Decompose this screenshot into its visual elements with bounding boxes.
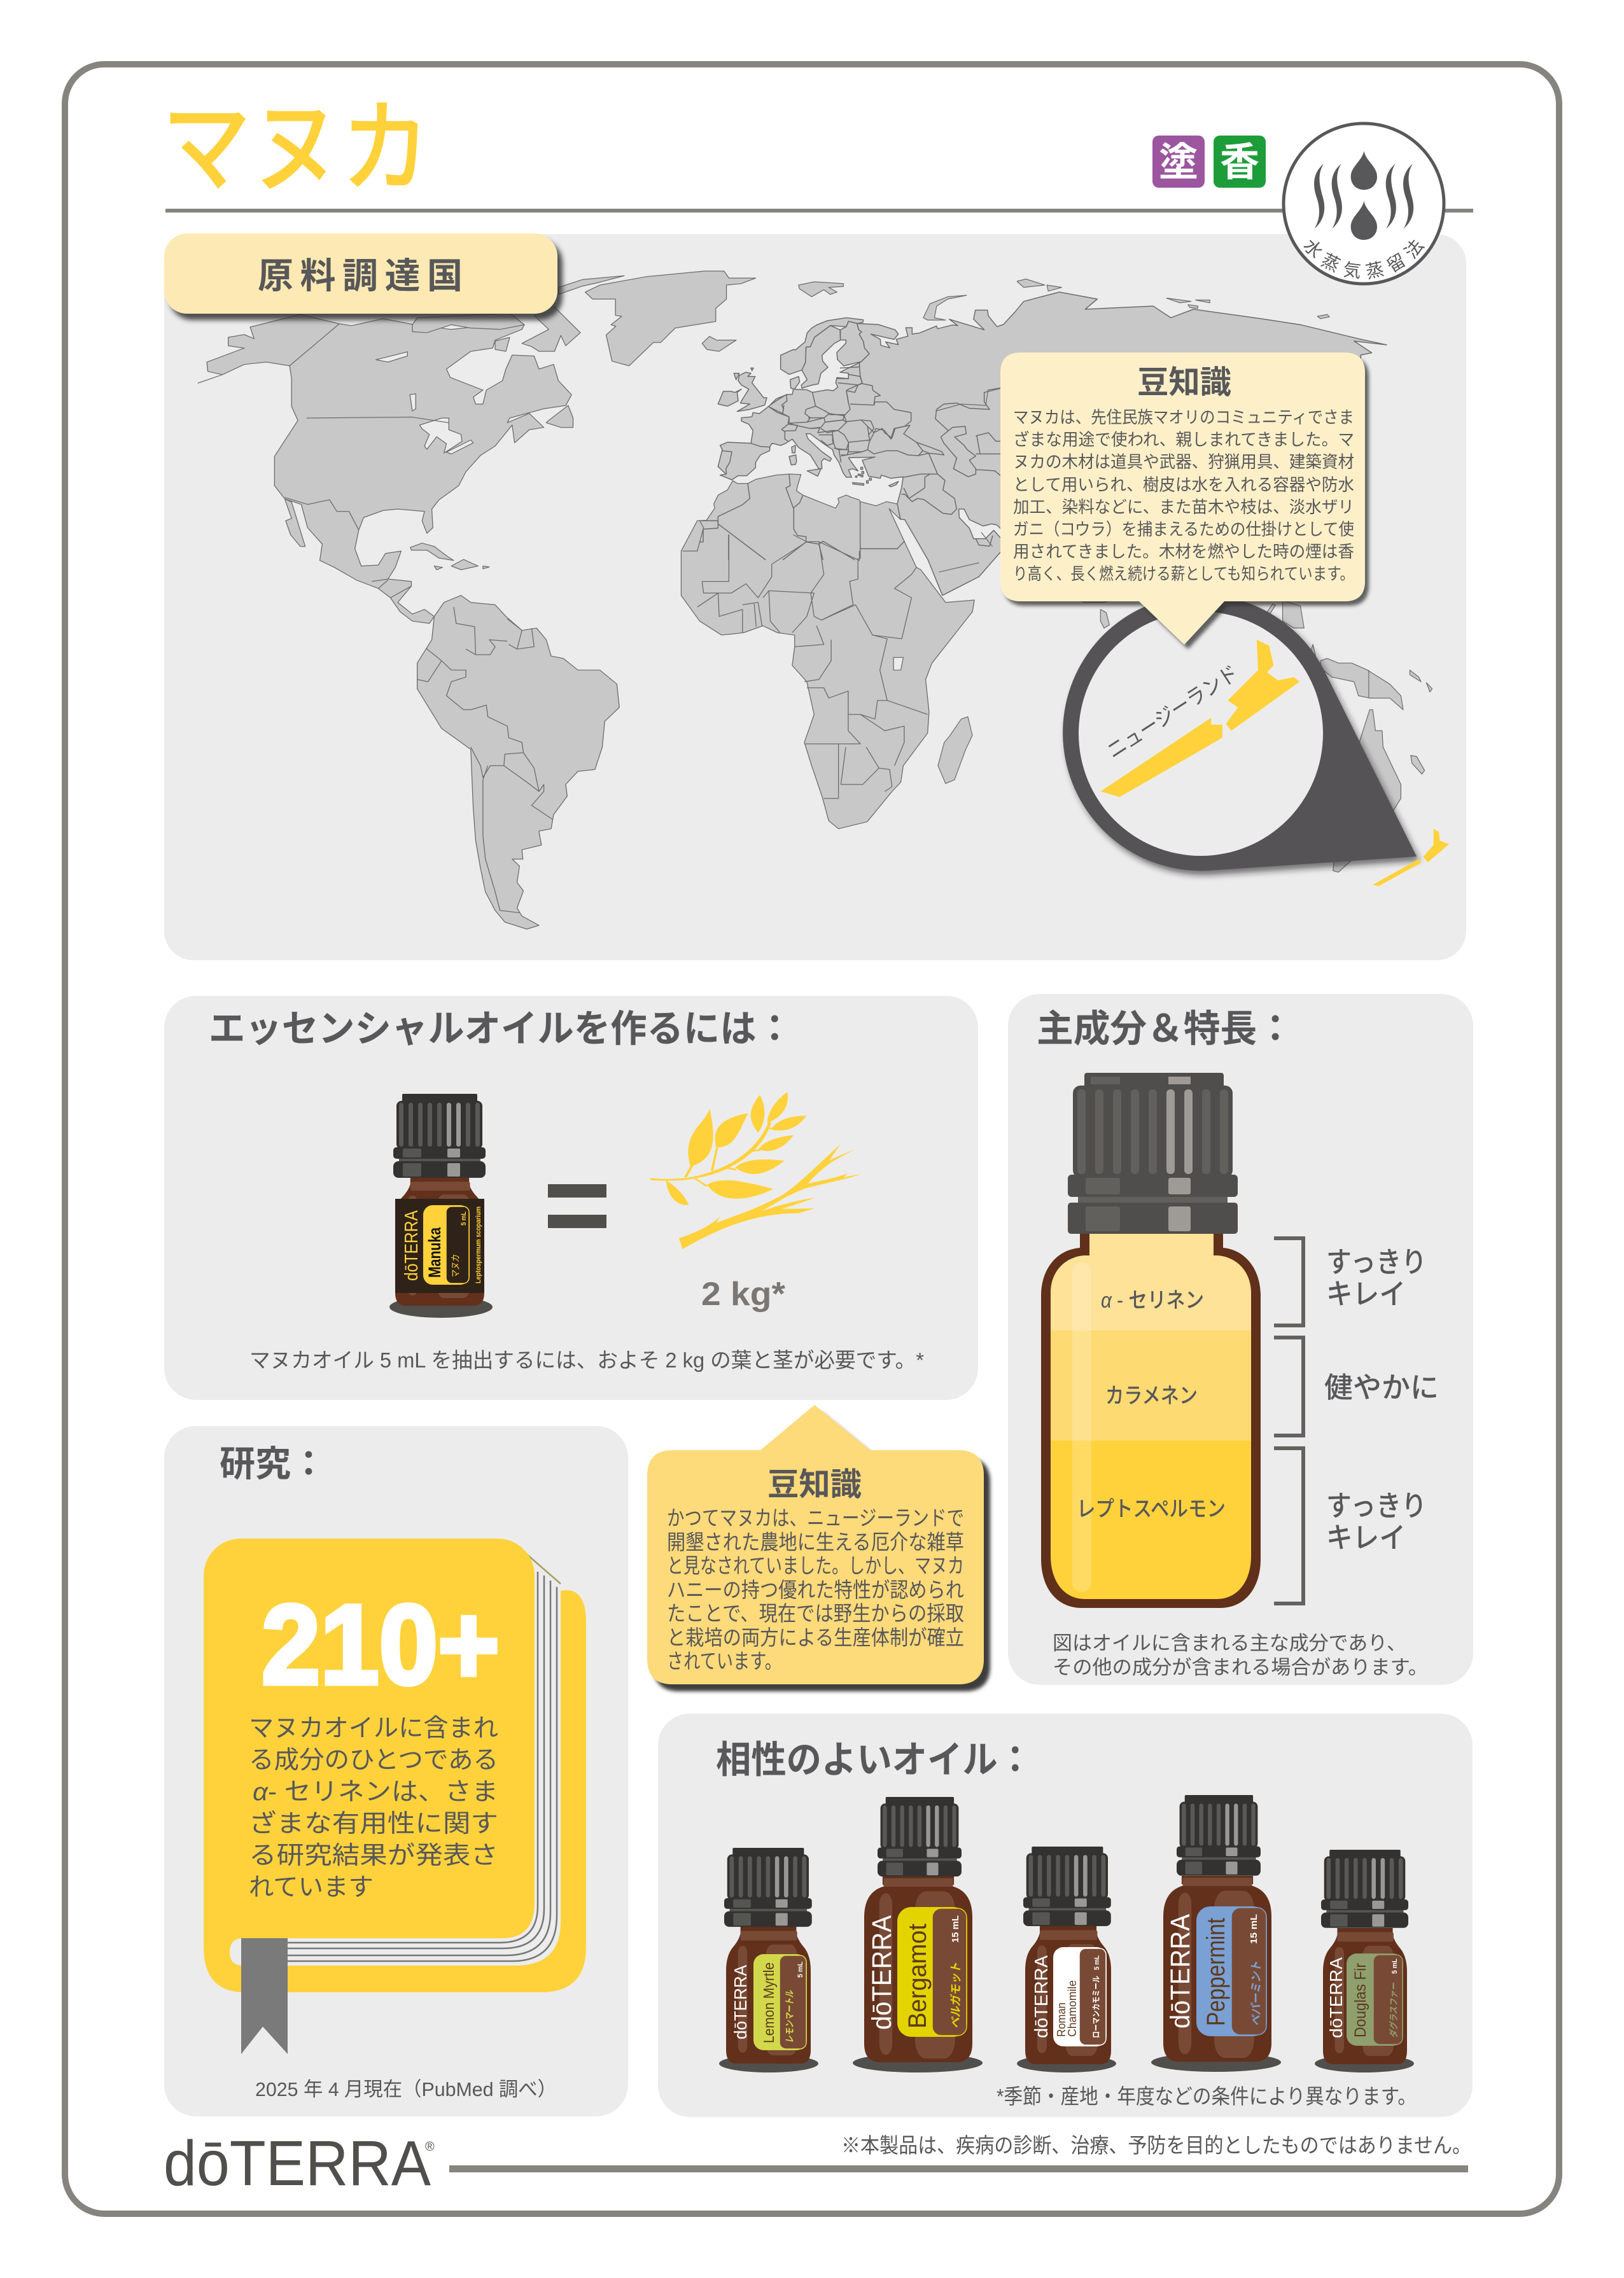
- world map: Asia islands and Oceania: [923, 279, 1432, 872]
- bottle: lemon myrtle: [719, 1848, 818, 2072]
- bottle cap: large: [1068, 1073, 1238, 1234]
- callout: trivia on map: [1000, 353, 1365, 645]
- callout body text: として用いられ、樹皮は水を入れる容器や防水: [1013, 475, 1354, 494]
- method label: 水蒸気蒸留法: [1303, 239, 1425, 280]
- book text: ざまな有用性に関す: [249, 1810, 498, 1838]
- footer rule: [449, 2165, 1468, 2172]
- book text: る成分のひとつである: [249, 1747, 498, 1774]
- equals sign: [548, 1184, 606, 1228]
- footnote: *季節・産地・年度などの条件により異なります。: [997, 2085, 1417, 2108]
- book text: マヌカオイルに含まれ: [249, 1715, 498, 1742]
- callout heading: 豆知識: [1137, 365, 1231, 400]
- panel: research: [164, 1426, 628, 2116]
- feature label 3: すっきり: [1326, 1490, 1427, 1522]
- bottle: douglas fir: [1315, 1850, 1414, 2072]
- panel: main constituents and features: [1008, 994, 1473, 1685]
- callout body text: 加工、染料などに、また苗木や枝は、淡水ザリ: [1013, 498, 1354, 517]
- bottle: constituent levels: [1041, 1234, 1261, 1608]
- bottle: roman chamomile: Chamomile: [1066, 1980, 1079, 2037]
- callout body text: たことで、現在では野生からの採取: [667, 1602, 964, 1625]
- callout body text: されています。: [667, 1649, 781, 1673]
- icon: steam distillation: [1282, 122, 1446, 285]
- callout heading: 豆知識: [767, 1467, 862, 1502]
- logo: doTERRA: ®: [425, 2140, 435, 2154]
- bottle: lemon myrtle: 5 mL: [797, 1962, 804, 1978]
- book text: α- セリネンは、さま: [253, 1778, 498, 1806]
- bottle: douglas fir: 5 mL: [1391, 1959, 1399, 1974]
- label: new zealand: ニュージーランド: [1103, 660, 1242, 763]
- callout body text: ガニ（コウラ）を捕まえるための仕掛けとして使: [1013, 520, 1354, 539]
- bottle: peppermint: Peppermint: [1202, 1918, 1230, 2026]
- bottle: lemon myrtle: レモンマートル: [785, 1990, 795, 2043]
- badge: aromatic: 香: [1220, 141, 1259, 185]
- bottle: roman chamomile: ローマンカモミール: [1091, 1976, 1101, 2038]
- heading: エッセンシャルオイルを作るには：: [209, 1008, 793, 1050]
- feature label 3: キレイ: [1326, 1521, 1406, 1554]
- magnifier lens: [1063, 594, 1417, 870]
- bottle: douglas fir: ダグラスファー: [1389, 1982, 1399, 2038]
- icon: manuka branch: [650, 1092, 862, 1249]
- bottle: manuka 5 mL: 5 mL: [460, 1212, 468, 1226]
- bottle: peppermint: 15 mL: [1249, 1914, 1259, 1944]
- brackets: [1274, 1238, 1303, 1604]
- note: 図はオイルに含まれる主な成分であり、: [1053, 1632, 1406, 1654]
- constituent: alpha selinene: α - セリネン: [1101, 1289, 1204, 1313]
- disclaimer: ※本製品は、疾病の診断、治療、予防を目的としたものではありません。: [841, 2134, 1471, 2157]
- bottle: manuka 5 mL: [389, 1094, 493, 1318]
- bottle: manuka 5 mL: Leptospermum scoparium: [475, 1206, 482, 1283]
- badge: topical: [1152, 136, 1205, 188]
- bottle: bergamot: Bergamot: [904, 1924, 932, 2029]
- badge: topical: 塗: [1159, 141, 1198, 185]
- caption: マヌカオイル 5 mL を抽出するには、およそ 2 kg の葉と茎が必要です。*: [249, 1348, 924, 1372]
- book text: る研究結果が発表さ: [249, 1842, 498, 1869]
- heading tab: sourcing countries: [164, 234, 557, 314]
- panel: sourcing map: [164, 234, 1466, 960]
- new zealand on map: [1373, 828, 1449, 886]
- heading tab: sourcing countries: 原料調達国: [258, 256, 463, 296]
- bottle: bergamot: dōTERRA: [867, 1915, 897, 2030]
- bottle: roman chamomile: Roman: [1055, 2002, 1068, 2037]
- bottle: peppermint: [1151, 1795, 1281, 2072]
- feature label 1: キレイ: [1326, 1278, 1406, 1310]
- drops and steam: [1314, 151, 1413, 240]
- title: マヌカ: [162, 91, 430, 205]
- bottle: peppermint: dōTERRA: [1165, 1914, 1196, 2029]
- feature label 1: すっきり: [1326, 1246, 1427, 1278]
- callout body text: ヌカの木材は道具や武器、狩猟用具、建築資材: [1013, 452, 1354, 472]
- book text: れています: [249, 1874, 374, 1901]
- new zealand enlarged: [1100, 639, 1299, 797]
- callout body text: と見なされていました。しかし、マヌカ: [667, 1554, 964, 1577]
- feature label 2: 健やかに: [1324, 1371, 1439, 1404]
- bottle: lemon myrtle: Lemon Myrtle: [760, 1962, 777, 2043]
- callout body text: り高く、長く燃え続ける薪としても知られています。: [1013, 564, 1354, 583]
- world map: Europe and Asia: [700, 292, 1387, 603]
- heading: 主成分＆特長：: [1037, 1008, 1294, 1050]
- callout body text: ハニーの持つ優れた特性が認められ: [667, 1578, 964, 1602]
- bottle: roman chamomile: dōTERRA: [1032, 1955, 1052, 2038]
- bookmark: [241, 1938, 288, 2054]
- bottle: bergamot: [853, 1797, 983, 2072]
- statistic: 210+: [262, 1581, 500, 1708]
- bottle: manuka 5 mL: Manuka: [425, 1227, 444, 1278]
- callout body text: [667, 1506, 964, 1673]
- callout body text: [1013, 408, 1354, 583]
- bottle: bergamot: ベルガモット: [949, 1962, 962, 2029]
- note: [1053, 1632, 1428, 1679]
- bottle: roman chamomile: 5 mL: [1093, 1955, 1101, 1970]
- callout body text: 用されてきました。木材を燃やした時の煙は香: [1013, 542, 1354, 561]
- world map: Americas and Africa: [198, 271, 974, 929]
- source note: 2025 年 4 月現在（PubMed 調べ）: [255, 2078, 557, 2100]
- panel: oils that blend well: [658, 1714, 1473, 2117]
- heading: 研究：: [220, 1444, 326, 1484]
- bottle: douglas fir: dōTERRA: [1326, 1957, 1346, 2038]
- note: その他の成分が含まれる場合があります。: [1053, 1656, 1428, 1679]
- feature label 1: [1326, 1246, 1427, 1310]
- callout body text: マヌカは、先住民族マオリのコミュニティでさま: [1013, 408, 1354, 427]
- feature label 3: [1326, 1490, 1427, 1554]
- badge: aromatic: [1214, 136, 1266, 188]
- bottle: douglas fir: Douglas Fir: [1352, 1963, 1369, 2037]
- bottle: manuka 5 mL: dōTERRA: [402, 1210, 422, 1281]
- heading: 相性のよいオイル：: [716, 1739, 1033, 1781]
- panel: how the oil is made: [164, 996, 978, 1400]
- constituent: calamenene: カラメネン: [1105, 1384, 1198, 1408]
- logo: doTERRA: dōTERRA: [164, 2128, 431, 2199]
- amount label: 2 kg*: [701, 1276, 786, 1313]
- book illustration: [204, 1539, 586, 2054]
- callout body text: 開墾された農地に生える厄介な雑草: [667, 1530, 964, 1554]
- bottle: bergamot: 15 mL: [950, 1915, 961, 1943]
- bottle: roman chamomile: [1017, 1847, 1116, 2072]
- bottle: peppermint: ペパーミント: [1250, 1961, 1263, 2026]
- callout body text: かつてマヌカは、ニュージーランドで: [667, 1506, 964, 1530]
- callout: trivia about weed history: [647, 1405, 984, 1684]
- constituent: leptospermone: レプトスペルモン: [1077, 1497, 1226, 1521]
- callout body text: ざまな用途で使われ、親しまれてきました。マ: [1013, 430, 1354, 449]
- callout body text: と栽培の両方による生産体制が確立: [667, 1626, 964, 1649]
- title rule: [165, 209, 1473, 213]
- bottle: lemon myrtle: dōTERRA: [731, 1965, 750, 2039]
- book text: [249, 1715, 498, 1901]
- bottle: manuka 5 mL: マヌカ: [451, 1255, 461, 1278]
